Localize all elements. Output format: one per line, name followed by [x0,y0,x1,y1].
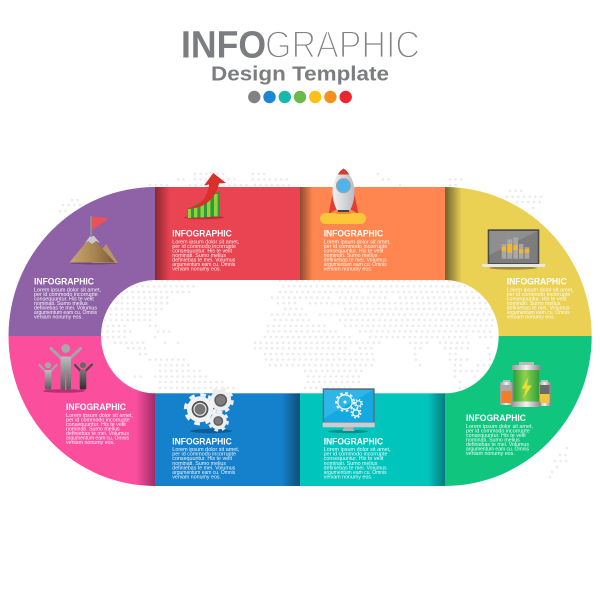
text block: consequuntur. His te velit [172,248,233,254]
text block: Lorem ipsum dolor sit amet, [172,239,239,245]
text block: nominati. Sumo melius [507,301,561,307]
text block: veniam nonumy eos. [324,267,372,273]
text block: Lorem ipsum dolor sit amet, [34,287,101,293]
purple segment [8,187,155,336]
text block: per id commodo incorrupte [466,428,530,434]
panel: blue gears [155,389,300,486]
text block: definiebas te mei. Volumus [172,465,236,471]
panel: yellow laptop [445,187,592,336]
text block [172,239,239,273]
text block [34,287,101,321]
text block: definiebas te mei. Volumus [507,306,570,312]
text block: nominati. Sumo melius [324,461,378,467]
text block: per id commodo incorrupte [507,292,571,298]
text block: Lorem ipsum dolor sit amet, [324,239,391,245]
panel: green battery [445,336,592,486]
panel: orange rocket [300,168,445,280]
title: GRAPHIC [265,24,420,66]
colour dots row [248,91,352,103]
text block: nominati. Sumo melius [324,253,378,259]
orange segment [300,187,445,280]
text block: consequuntur. His te velit [507,296,567,302]
text block: definiebas te mei. Volumus [66,431,130,437]
yellow segment [445,187,592,336]
heading: INFOGRAPHIC [66,402,126,412]
text block: veniam nonumy eos. [466,451,515,457]
text block: Lorem ipsum dolor sit amet, [507,287,574,293]
panel: teal monitor [300,388,445,486]
title: INFO [181,24,266,66]
title [181,24,420,66]
text block: definiebas te mei. Volumus [172,258,236,264]
text block: definiebas te mei. Volumus [466,442,530,448]
text block: nominati. Sumo melius [34,301,88,307]
icon: rocket [320,168,366,224]
text block: argumentum eam cu. Omnis [466,447,529,453]
heading: INFOGRAPHIC [507,276,567,286]
pink segment [8,336,155,486]
icon: growth chart with arrow [184,173,226,219]
text block: Lorem ipsum dolor sit amet, [172,447,239,453]
heading: INFOGRAPHIC [172,229,232,239]
text block: definiebas te mei. Volumus [34,306,98,312]
text block: argumentum eam cu. Omnis [34,310,97,316]
text block: Lorem ipsum dolor sit amet, [466,424,533,430]
text block: veniam nonumy eos. [172,267,221,273]
text block: per id commodo incorrupte [324,244,388,250]
text block: argumentum eam cu. Omnis [66,436,129,442]
text block [324,239,391,273]
icon: group of people [40,344,92,393]
text block: consequuntur. His te velit [172,456,233,462]
text block: nominati. Sumo melius [172,253,227,259]
text block: definiebas te mei. Volumus [324,258,387,264]
text block: per id commodo incorrupte [172,452,236,458]
text block: per id commodo incorrupte [34,292,98,298]
blue segment [155,393,300,486]
icon: gears [185,389,232,433]
text block [324,447,391,480]
text block: nominati. Sumo melius [172,461,227,467]
text block: definiebas te mei. Volumus [324,465,387,471]
subtitle: Design Template [211,63,389,86]
text block: veniam nonumy eos. [66,440,115,446]
text block: consequuntur. His te velit [66,422,126,428]
text block: veniam nonumy eos. [172,474,221,480]
text block: consequuntur. His te velit [34,296,94,302]
text block: per id commodo incorrupte [172,244,236,250]
text block: argumentum eam cu. Omnis [172,262,236,268]
heading: INFOGRAPHIC [172,436,232,446]
text block [466,424,533,457]
icon: mountain with flag [70,216,118,264]
icon: monitor with gears [323,388,375,433]
text block [66,413,133,446]
text block: consequuntur. His te velit [466,433,526,439]
heading: INFOGRAPHIC [324,229,383,239]
world map dot pattern [60,174,569,477]
text block: argumentum eam cu. Omnis [172,470,236,476]
heading: INFOGRAPHIC [466,413,526,423]
green segment [445,336,592,486]
text block: argumentum eam cu. Omnis [507,310,570,316]
red segment [155,187,300,280]
text block: Lorem ipsum dolor sit amet, [66,413,133,419]
text block: per id commodo incorrupte [324,452,388,458]
icon: batteries [500,362,551,407]
text block: veniam nonumy eos. [34,315,83,321]
text block: consequuntur. His te velit [324,456,384,462]
text block: per id commodo incorrupte [66,417,130,423]
heading: INFOGRAPHIC [324,436,383,446]
teal segment [300,393,445,486]
text block: nominati. Sumo melius [66,426,120,432]
icon: laptop with bar chart [482,229,546,270]
text block: veniam nonumy eos. [507,315,555,321]
text block: argumentum eam cu. Omnis [324,262,387,268]
heading: INFOGRAPHIC [34,276,94,286]
text block [507,287,574,321]
panel: pink people [8,336,155,486]
text block: argumentum eam cu. Omnis [324,470,387,476]
panel: red growth [155,173,300,280]
text block [172,447,239,480]
text block: nominati. Sumo melius [466,437,520,443]
panel: purple mountain [8,187,155,336]
text block: Lorem ipsum dolor sit amet, [324,447,391,453]
text block: consequuntur. His te velit [324,248,384,254]
text block: veniam nonumy eos. [324,474,372,480]
